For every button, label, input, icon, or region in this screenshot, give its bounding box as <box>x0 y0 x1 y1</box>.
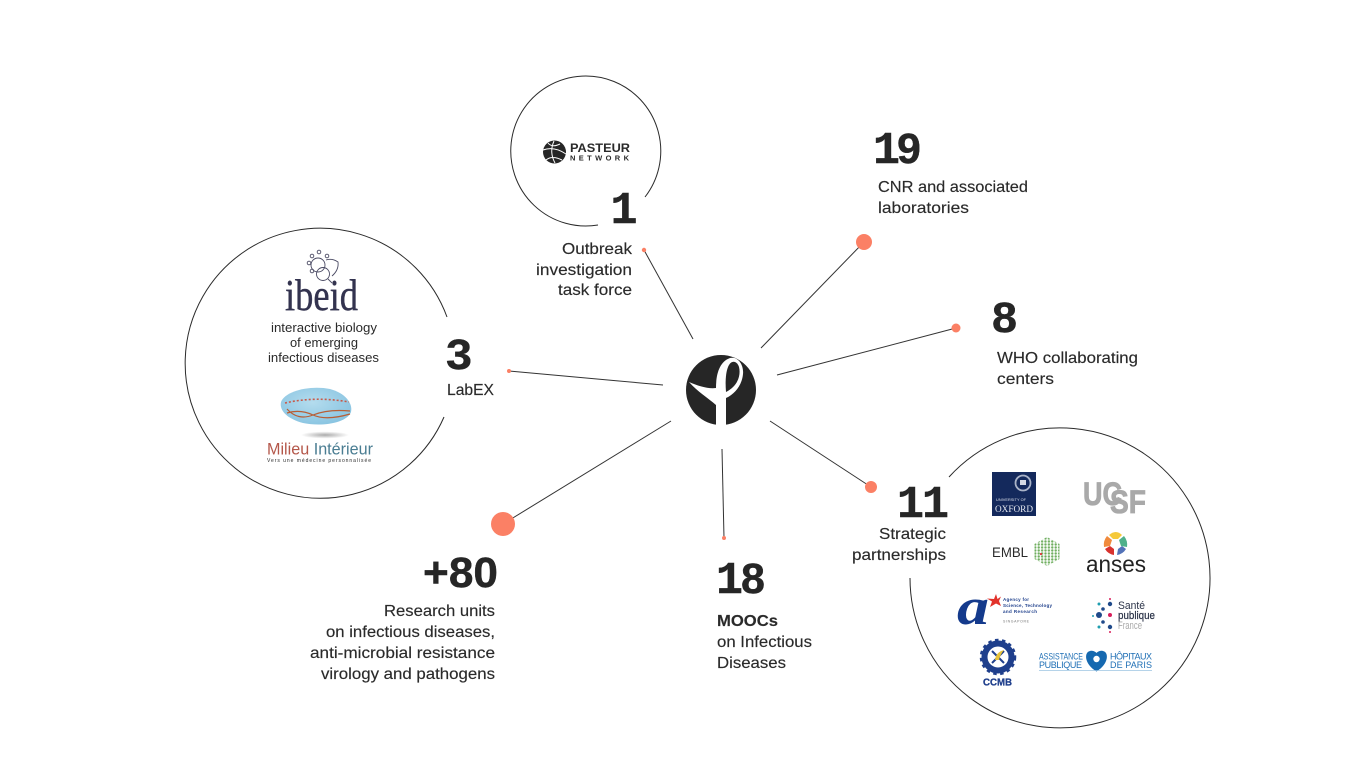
logo: University of Oxford: UNIVERSITY OF <box>996 498 1027 502</box>
logo: CCMB: CCMB <box>983 678 1012 688</box>
logo: A*STAR: and Research <box>1003 609 1037 614</box>
logo: Assistance Publique Hôpitaux de Paris: HÔPITAUX <box>1110 652 1152 662</box>
logo: Pasteur Network <box>543 140 630 164</box>
logo: Assistance Publique Hôpitaux de Paris: ASSISTANCE <box>1039 652 1083 662</box>
logo: anses <box>1086 532 1146 577</box>
text: strategic partnerships label: Strategic <box>879 526 946 543</box>
number: +80: +80 <box>423 549 498 597</box>
number: 1: 1 <box>610 186 638 237</box>
text: research units label <box>310 603 495 683</box>
panel: CNR and associated laboratories <box>761 125 1028 348</box>
logo: EMBL: EMBL <box>992 545 1028 560</box>
logo: A*STAR: Agency for <box>1003 597 1029 602</box>
text: MOOCs label: Diseases <box>717 655 786 672</box>
text: Milieu Intérieur tagline: Vers une médecine personnalisée <box>267 458 371 464</box>
text: CNR label: CNR and associated <box>878 179 1028 196</box>
logo: Santé publique France: France <box>1118 620 1142 632</box>
logo: Santé publique France: Santé <box>1118 600 1145 612</box>
text: outbreak label: task force <box>558 282 632 299</box>
logo: A*STAR <box>957 579 1052 636</box>
panel: outbreak investigation task force <box>511 76 693 339</box>
number: 11: 1 <box>897 480 924 531</box>
text: CNR label <box>878 179 1028 217</box>
connector: CNR <box>761 234 872 348</box>
panel: research units <box>310 421 671 683</box>
number: 19: 1 <box>873 126 900 177</box>
panel: MOOCs <box>716 449 812 672</box>
text: WHO label <box>997 350 1138 388</box>
icon: Milieu Intérieur cell <box>281 388 351 438</box>
connector: MOOCs <box>722 449 726 540</box>
logo: Santé publique France: publique <box>1118 610 1155 622</box>
text: ibeid description: interactive biology <box>271 321 378 335</box>
connector: outbreak <box>642 248 693 339</box>
logo: Assistance Publique Hôpitaux de Paris: PUBLIQUE <box>1039 660 1082 670</box>
logo: Milieu Intérieur: Milieu Intérieur <box>267 440 373 458</box>
panel: strategic partnerships <box>770 421 1210 728</box>
logo: anses: anses <box>1086 551 1146 577</box>
circle: Pasteur Network <box>511 76 661 226</box>
logo: Santé publique France <box>1092 598 1155 633</box>
text: research units label: on infectious diseases, <box>326 624 495 641</box>
text: strategic partnerships label <box>852 526 946 564</box>
connector: LabEX <box>507 369 663 385</box>
logo: A*STAR: Science, Technology <box>1003 603 1052 608</box>
logo: University of Oxford <box>992 472 1036 516</box>
logo: EMBL <box>992 537 1060 566</box>
connector: research units <box>491 421 671 536</box>
number: 19: 9 <box>897 125 921 173</box>
logo: Pasteur Network: NETWORK <box>570 154 630 162</box>
text: WHO label: WHO collaborating <box>997 350 1138 367</box>
panel: LabEX <box>185 228 663 498</box>
number: 18: 1 <box>716 556 743 607</box>
logo: UCSF: UC <box>1083 476 1122 512</box>
text: strategic partnerships label: partnerships <box>852 547 946 564</box>
text: MOOCs label: MOOCs <box>717 613 778 630</box>
text: ibeid description: of emerging <box>290 336 358 350</box>
logo: ibeid: ibeid <box>285 271 358 320</box>
text: outbreak label: investigation <box>536 262 632 279</box>
text: ibeid description: infectious diseases <box>268 351 379 365</box>
text: research units label: Research units <box>384 603 495 620</box>
text: MOOCs label <box>717 613 812 672</box>
text: outbreak label: Outbreak <box>562 241 633 258</box>
logo: Pasteur Network: PASTEUR <box>570 141 630 155</box>
logo: UCSF: SF <box>1110 484 1146 520</box>
logo: University of Oxford: OXFORD <box>995 504 1034 514</box>
number: 18: 8 <box>741 555 765 603</box>
logo: Assistance Publique Hôpitaux de Paris: DE PARIS <box>1110 660 1152 670</box>
number: 3: 3 <box>446 331 472 379</box>
connector: partnerships <box>770 421 877 493</box>
icon: ibeid network <box>307 250 338 283</box>
logo: A*STAR: a <box>957 579 989 636</box>
text: LabEX label: LabEX <box>447 382 494 399</box>
text: research units label: virology and pathogens <box>321 666 495 683</box>
logo: CCMB <box>981 640 1015 688</box>
text: research units label: anti-microbial resistance <box>310 645 495 662</box>
circle: partners <box>910 428 1210 728</box>
circle: LabEX <box>185 228 447 498</box>
central logo <box>686 355 756 425</box>
connector: WHO <box>777 324 960 375</box>
text: outbreak label <box>536 241 633 299</box>
text: CNR label: laboratories <box>878 200 969 217</box>
logo: Assistance Publique Hôpitaux de Paris <box>1039 651 1152 672</box>
logo: UCSF <box>1083 476 1146 520</box>
text: WHO label: centers <box>997 371 1054 388</box>
panel: WHO collaborating centers <box>777 294 1138 388</box>
text: ibeid description <box>268 321 379 365</box>
logo: A*STAR: SINGAPORE <box>1003 620 1030 624</box>
text: MOOCs label: on Infectious <box>717 634 812 651</box>
number: 8: 8 <box>992 294 1017 342</box>
number: 11: 1 <box>922 480 949 531</box>
